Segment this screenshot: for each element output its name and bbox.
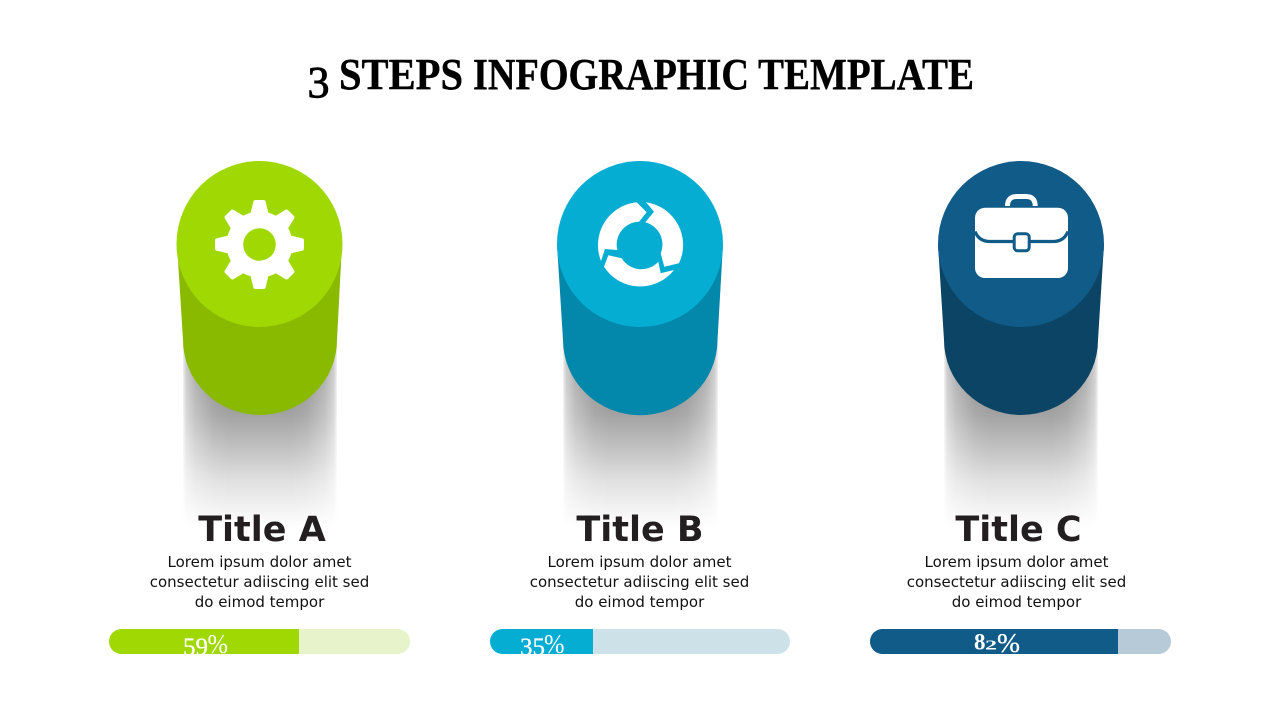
cylinder shadow B (563, 340, 718, 528)
panel: step C (870, 161, 1171, 658)
cylinder top C (938, 161, 1104, 327)
progress bar B: 35% (490, 629, 790, 654)
text block C: do eimod tempor (952, 593, 1082, 611)
cylinder top A (176, 161, 342, 327)
progress bar C: 82%: 8 (974, 630, 986, 654)
icon: cycle arrows (598, 202, 683, 286)
cylinder body A (177, 244, 342, 415)
title: 3 (308, 58, 330, 107)
text block A: do eimod tempor (195, 593, 325, 611)
icon: briefcase (975, 196, 1068, 278)
progress bar B: 35%: 35 (520, 634, 545, 661)
progress bar C: 82%: 2 (985, 638, 997, 654)
text block B: do eimod tempor (575, 593, 705, 611)
text block A (150, 553, 369, 611)
progress bar C: 82%: % (997, 628, 1020, 658)
cylinder body B (557, 244, 723, 415)
title: STEPS (339, 50, 463, 99)
cylinder body C (938, 244, 1104, 415)
panel: step A (109, 161, 410, 661)
text block C: consectetur adiiscing elit sed (907, 573, 1126, 591)
icon: gear (215, 200, 304, 289)
text block A: Lorem ipsum dolor amet (168, 553, 352, 571)
cylinder top B (557, 161, 723, 327)
text block A: consectetur adiiscing elit sed (150, 573, 369, 591)
heading: Title C: Title C (955, 510, 1082, 550)
progress bar B: 35%: % (544, 629, 564, 659)
progress bar A: 59% (109, 629, 410, 654)
progress bar A: 59%: 59 (183, 634, 208, 661)
title: TEMPLATE (758, 50, 974, 99)
text block B: Lorem ipsum dolor amet (548, 553, 732, 571)
text block B (530, 553, 749, 611)
title (308, 50, 974, 107)
progress bar C: 82% (870, 629, 1171, 654)
heading: Title B: Title B (576, 510, 704, 550)
text block C (907, 553, 1126, 611)
text block C: Lorem ipsum dolor amet (924, 553, 1109, 571)
cylinder shadow A (183, 340, 337, 528)
progress bar A: 59%: % (208, 629, 228, 659)
title: INFOGRAPHIC (473, 50, 749, 99)
panel: step B (490, 161, 790, 661)
cylinder shadow C (944, 340, 1098, 528)
heading: Title A: Title A (198, 510, 326, 550)
text block B: consectetur adiiscing elit sed (530, 573, 749, 591)
